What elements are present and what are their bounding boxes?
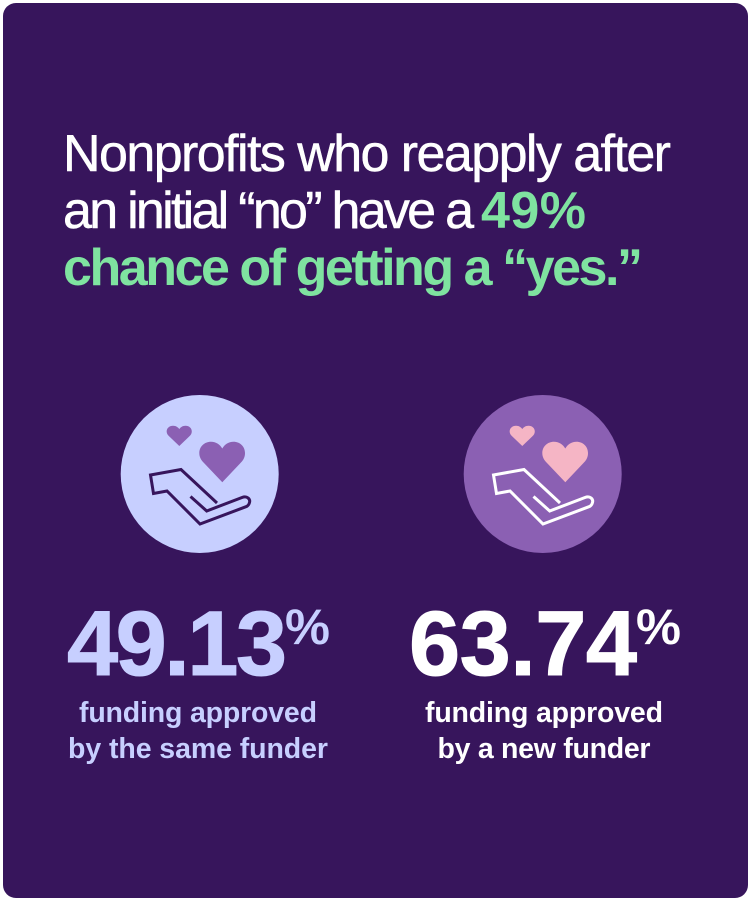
title — [63, 125, 671, 297]
icon: hand with hearts, new funder — [464, 395, 622, 553]
title: chance of getting a “yes.” — [63, 239, 643, 297]
title: an initial “no” have a — [63, 182, 474, 240]
label: new funder: funding approved — [425, 697, 663, 729]
title: 49% — [481, 182, 586, 240]
label: same funder: by the same funder — [68, 733, 328, 765]
title: Nonprofits who reapply after — [63, 125, 671, 183]
label: new funder — [425, 697, 663, 765]
label: new funder: by a new funder — [438, 733, 650, 765]
icon: hand with hearts, same funder — [121, 395, 279, 553]
label: same funder: funding approved — [79, 697, 317, 729]
stat: new funder: 63.74 — [409, 593, 637, 695]
label: same funder — [68, 697, 328, 765]
stat: same funder: 49.13 — [67, 593, 287, 695]
stat: same funder: % — [285, 599, 330, 655]
stat: new funder: % — [636, 599, 681, 655]
